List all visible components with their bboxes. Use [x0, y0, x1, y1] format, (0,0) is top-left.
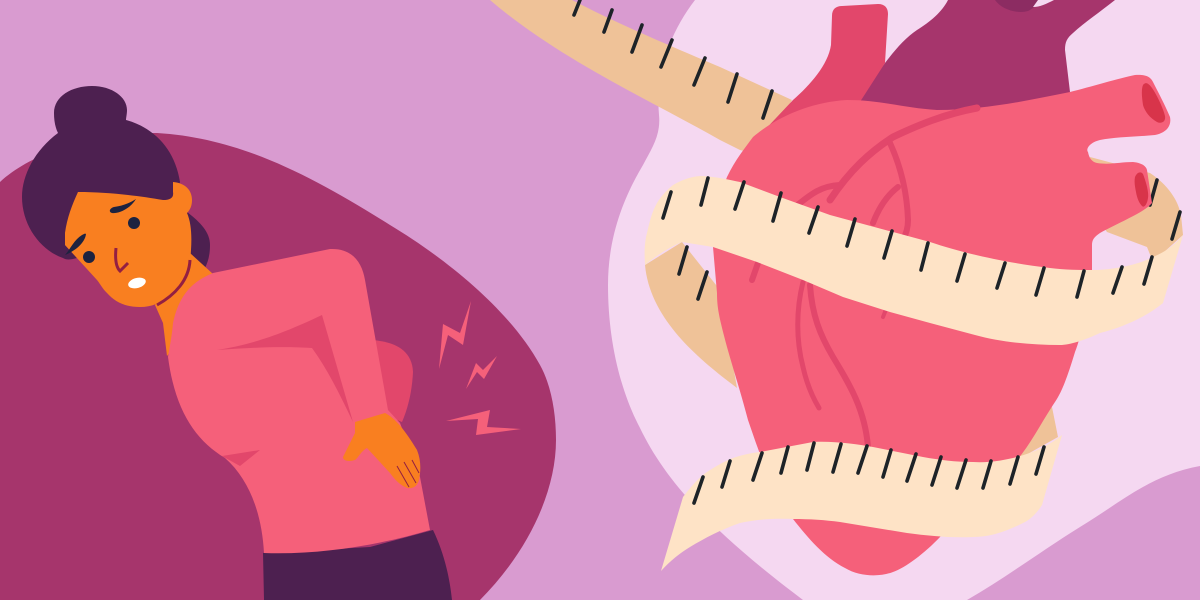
hand [343, 413, 420, 488]
group: woman [22, 86, 521, 600]
finger lines [397, 460, 419, 487]
back hair [185, 212, 210, 268]
aorta opening 2 [1135, 172, 1148, 207]
heart back vessel [858, 0, 1115, 115]
neck line [157, 260, 190, 305]
tape front middle [645, 176, 1183, 345]
nose [116, 248, 128, 271]
heart [713, 75, 1170, 575]
tape top ticks [574, 0, 772, 118]
arm fold [217, 315, 353, 422]
tape back top [490, 0, 792, 155]
pain bolts [439, 301, 521, 435]
neck [155, 253, 213, 356]
eyebrows [110, 199, 136, 213]
tape lower ticks [694, 443, 1044, 503]
face details [65, 199, 190, 305]
body pink jumper [168, 249, 430, 553]
eyes [128, 217, 140, 229]
tape front ticks [663, 178, 1152, 297]
blob: light pink right background [608, 0, 1200, 600]
tape front lower [661, 435, 1062, 571]
tape back left [645, 242, 737, 388]
heart vessels [752, 108, 977, 447]
heart aorta back [760, 4, 888, 135]
hair and bun [22, 86, 180, 260]
tape back lower right [1000, 407, 1058, 460]
face [65, 182, 192, 307]
back tape ticks [679, 180, 1180, 299]
aorta opening 1 [1142, 83, 1165, 123]
mouth [127, 276, 147, 290]
rear shadow behind arm [372, 340, 413, 422]
blob: lower right wave [967, 466, 1200, 600]
tape back right [1085, 157, 1183, 262]
blob: dark magenta behind woman [0, 133, 556, 600]
trousers [263, 530, 452, 600]
